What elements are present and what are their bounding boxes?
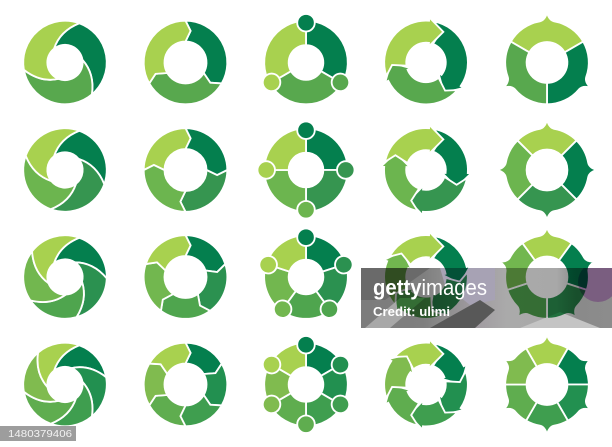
watermark band xyxy=(361,262,612,328)
image id badge: 1480379406 xyxy=(8,429,72,440)
diagram: spiked ring 3 segments xyxy=(486,13,608,119)
diagram: arrow ring 4 segments xyxy=(381,125,471,215)
image id badge xyxy=(0,426,76,441)
diagram: node ring 6 segments xyxy=(252,332,360,437)
diagram: arrow ring 5 segments xyxy=(366,222,479,336)
watermark credit: Credit: ulimi xyxy=(373,305,450,319)
diagram: notched ring 5 segments xyxy=(129,226,238,334)
diagram: arrow ring 6 segments xyxy=(370,329,482,440)
diagram: swirl 3 segments xyxy=(10,10,107,118)
diagram: spiked ring 4 segments xyxy=(497,120,597,220)
diagram: spiked ring 5 segments xyxy=(492,227,602,332)
diagram: node ring 4 segments xyxy=(257,121,355,219)
diagram: notched ring 4 segments xyxy=(144,128,227,212)
diagram: spiked ring 6 segments xyxy=(493,335,601,434)
diagram: swirl 4 segments xyxy=(23,128,107,212)
diagram: swirl 6 segments xyxy=(10,329,120,440)
diagram: arrow ring 3 segments xyxy=(370,11,468,119)
diagram: node ring 3 segments xyxy=(249,14,352,120)
diagram: notched ring 3 segments xyxy=(128,16,227,120)
diagram: node ring 5 segments xyxy=(249,226,358,334)
diagram: swirl 5 segments xyxy=(8,225,115,333)
diagram: notched ring 6 segments xyxy=(131,332,240,437)
watermark logo text: gettyimages xyxy=(373,275,487,300)
